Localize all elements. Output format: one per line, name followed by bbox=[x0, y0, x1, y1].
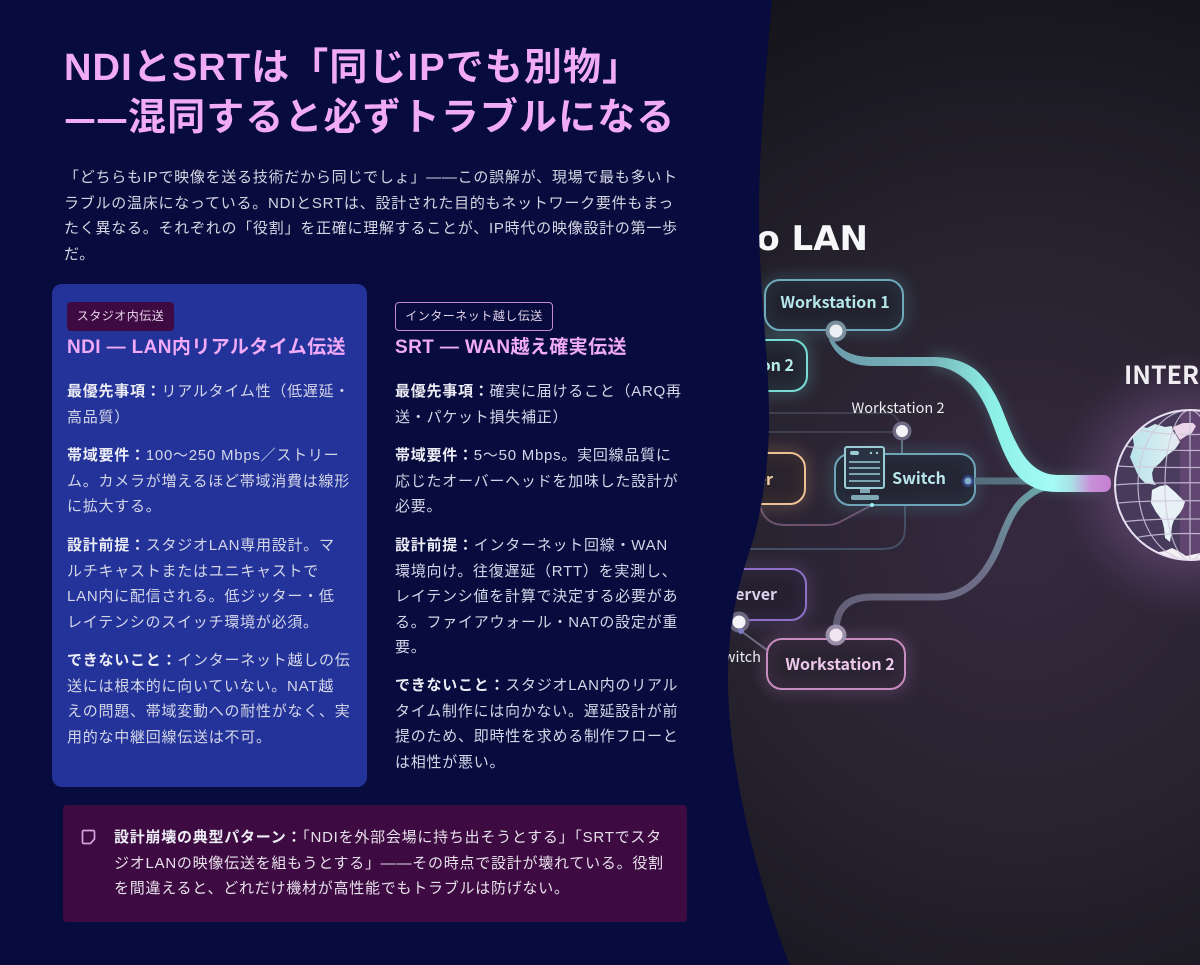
South America bbox=[1151, 485, 1185, 542]
Antarctica bbox=[1158, 548, 1200, 559]
text: SRT priority: 最優先事項：確実に届けること（ARQ再 bbox=[395, 383, 682, 400]
cable: Workstation 2 to Internet bbox=[836, 487, 1046, 632]
left navy panel with curved edge bbox=[0, 0, 790, 965]
text: SRT design premise: 要。 bbox=[395, 639, 427, 656]
node: Workstation 2 (teal, clipped) bbox=[685, 340, 807, 391]
text: NDI design premise: 設計前提：スタジオLAN専用設計。マ bbox=[67, 537, 335, 554]
title bbox=[64, 47, 675, 139]
heading: SRT: SRT — WAN越え確実伝送 bbox=[395, 337, 627, 358]
text: NDI bandwidth bbox=[67, 447, 350, 515]
text: SRT design premise bbox=[395, 537, 678, 656]
text: NDI design premise: LAN内に配信される。低ジッター・低 bbox=[67, 588, 335, 605]
node: Switch bbox=[835, 447, 975, 507]
switch uplink bbox=[975, 478, 1040, 484]
icon: server rack bbox=[845, 447, 884, 500]
thin connection lines bbox=[740, 413, 905, 650]
icon: globe bbox=[1115, 405, 1200, 570]
text: SRT limits bbox=[395, 677, 679, 770]
North America bbox=[1130, 424, 1180, 485]
switch port bbox=[962, 475, 974, 487]
text: SRT bandwidth: 必要。 bbox=[395, 498, 442, 515]
callout text bbox=[114, 829, 664, 897]
node: Server (purple, clipped) bbox=[700, 569, 806, 620]
intro paragraph: だ。 bbox=[64, 246, 95, 263]
tag: internet bbox=[395, 302, 553, 331]
node: Server (purple, clipped): Server bbox=[725, 581, 777, 605]
callout bbox=[63, 805, 687, 922]
node: server (orange, clipped) bbox=[700, 453, 805, 504]
callout text: ジオLANの映像伝送を組もうとする」——その時点で設計が壊れている。役割 bbox=[114, 854, 664, 872]
cable glow bbox=[932, 361, 1100, 484]
heading: Studio LAN: Studio LAN bbox=[655, 219, 868, 259]
globe halo bbox=[1055, 350, 1200, 620]
callout text: 設計崩壊の典型パターン：「NDIを外部会場に持ち出そうとする」「SRTでスタ bbox=[114, 829, 662, 846]
tag: studio: スタジオ内伝送 bbox=[77, 309, 164, 323]
text: NDI bandwidth: 帯域要件：100〜250 Mbps／ストリー bbox=[67, 447, 339, 464]
node: server (orange, clipped): Server bbox=[721, 466, 773, 490]
node: Workstation 1 bbox=[765, 280, 903, 330]
node: Workstation 2 (teal, clipped): Workstation 2 bbox=[685, 352, 794, 376]
tag: internet: インターネット越し伝送 bbox=[405, 309, 543, 323]
label: Switch: Switch bbox=[715, 646, 761, 667]
Greenland bbox=[1173, 423, 1196, 440]
text: SRT limits: できないこと：スタジオLAN内のリアル bbox=[395, 677, 678, 694]
text: SRT design premise: 設計前提：インターネット回線・WAN bbox=[395, 537, 668, 554]
text: SRT design premise: る。ファイアウォール・NATの設定が重 bbox=[395, 614, 678, 630]
network diagram artwork bbox=[728, 0, 1200, 965]
text: NDI limits: 送には根本的に向いていない。NAT越 bbox=[67, 678, 334, 694]
node: Workstation 2: Workstation 2 bbox=[785, 651, 895, 675]
text: SRT bandwidth: 応じたオーバーヘッドを加味した設計が bbox=[395, 472, 678, 490]
node: Workstation 1: Workstation 1 bbox=[780, 289, 890, 313]
dark artwork background bbox=[640, 0, 1200, 965]
node: Switch: Switch bbox=[892, 465, 946, 489]
text: SRT priority bbox=[395, 383, 682, 426]
connector dots bbox=[728, 320, 912, 646]
text: SRT limits: タイム制作には向かない。遅延設計が前 bbox=[395, 702, 678, 720]
title: NDIとSRTは「同じIPでも別物」 bbox=[64, 47, 641, 89]
text: NDI limits: えの問題、帯域変動への耐性がなく、実 bbox=[67, 703, 351, 720]
text: NDI priority: 高品質） bbox=[67, 408, 130, 426]
intro paragraph: 「どちらもIPで映像を送る技術だから同じでしょ」——この誤解が、現場で最も多いト bbox=[64, 169, 678, 186]
text: NDI design premise: ルチキャストまたはユニキャストで bbox=[67, 562, 319, 580]
text: SRT limits: 提のため、即時性を求める制作フローと bbox=[395, 728, 679, 745]
intro paragraph bbox=[64, 169, 678, 263]
icon: note bbox=[82, 830, 96, 844]
text: NDI design premise bbox=[67, 537, 335, 630]
text: NDI limits bbox=[67, 652, 351, 746]
text: SRT limits: は相性が悪い。 bbox=[395, 754, 505, 770]
text: SRT priority: 送・パケット損失補正） bbox=[395, 408, 568, 426]
label: Workstation 2: Workstation 2 bbox=[851, 397, 945, 418]
text: SRT bandwidth bbox=[395, 447, 678, 515]
text: SRT design premise: 環境向け。往復遅延（RTT）を実測し、 bbox=[395, 562, 677, 580]
intro paragraph: ラブルの温床になっている。NDIとSRTは、設計された目的もネットワーク要件もまっ bbox=[64, 195, 674, 212]
intro paragraph: たく異なる。それぞれの「役割」を正確に理解することが、IP時代の映像設計の第一歩 bbox=[64, 220, 678, 237]
node: Workstation 2 bbox=[767, 639, 905, 689]
text: SRT bandwidth: 帯域要件：5〜50 Mbps。実回線品質に bbox=[395, 447, 672, 464]
text: NDI design premise: レイテンシのスイッチ環境が必須。 bbox=[67, 614, 319, 630]
text: NDI bandwidth: ム。カメラが増えるほど帯域消費は線形 bbox=[67, 472, 350, 490]
box glows bbox=[700, 280, 975, 689]
text: NDI bandwidth: に拡大する。 bbox=[67, 498, 162, 515]
callout text: を間違えると、どれだけ機材が高性能でもトラブルは防げない。 bbox=[114, 880, 570, 897]
tag: studio bbox=[67, 302, 174, 331]
text: NDI limits: 用的な中継回線伝送は不可。 bbox=[67, 728, 272, 746]
heading: NDI: NDI — LAN内リアルタイム伝送 bbox=[67, 337, 346, 358]
text: NDI limits: できないこと：インターネット越しの伝 bbox=[67, 652, 351, 669]
cable: Workstation 1 to Internet bbox=[829, 336, 1111, 492]
panel: NDI bbox=[52, 284, 367, 787]
text: NDI priority: 最優先事項：リアルタイム性（低遅延・ bbox=[67, 383, 350, 400]
title: ——混同すると必ずトラブルになる bbox=[64, 97, 675, 139]
text: SRT design premise: レイテンシ値を計算で決定する必要があ bbox=[395, 588, 678, 605]
panel: SRT bbox=[395, 302, 682, 770]
text: NDI priority bbox=[67, 383, 350, 426]
